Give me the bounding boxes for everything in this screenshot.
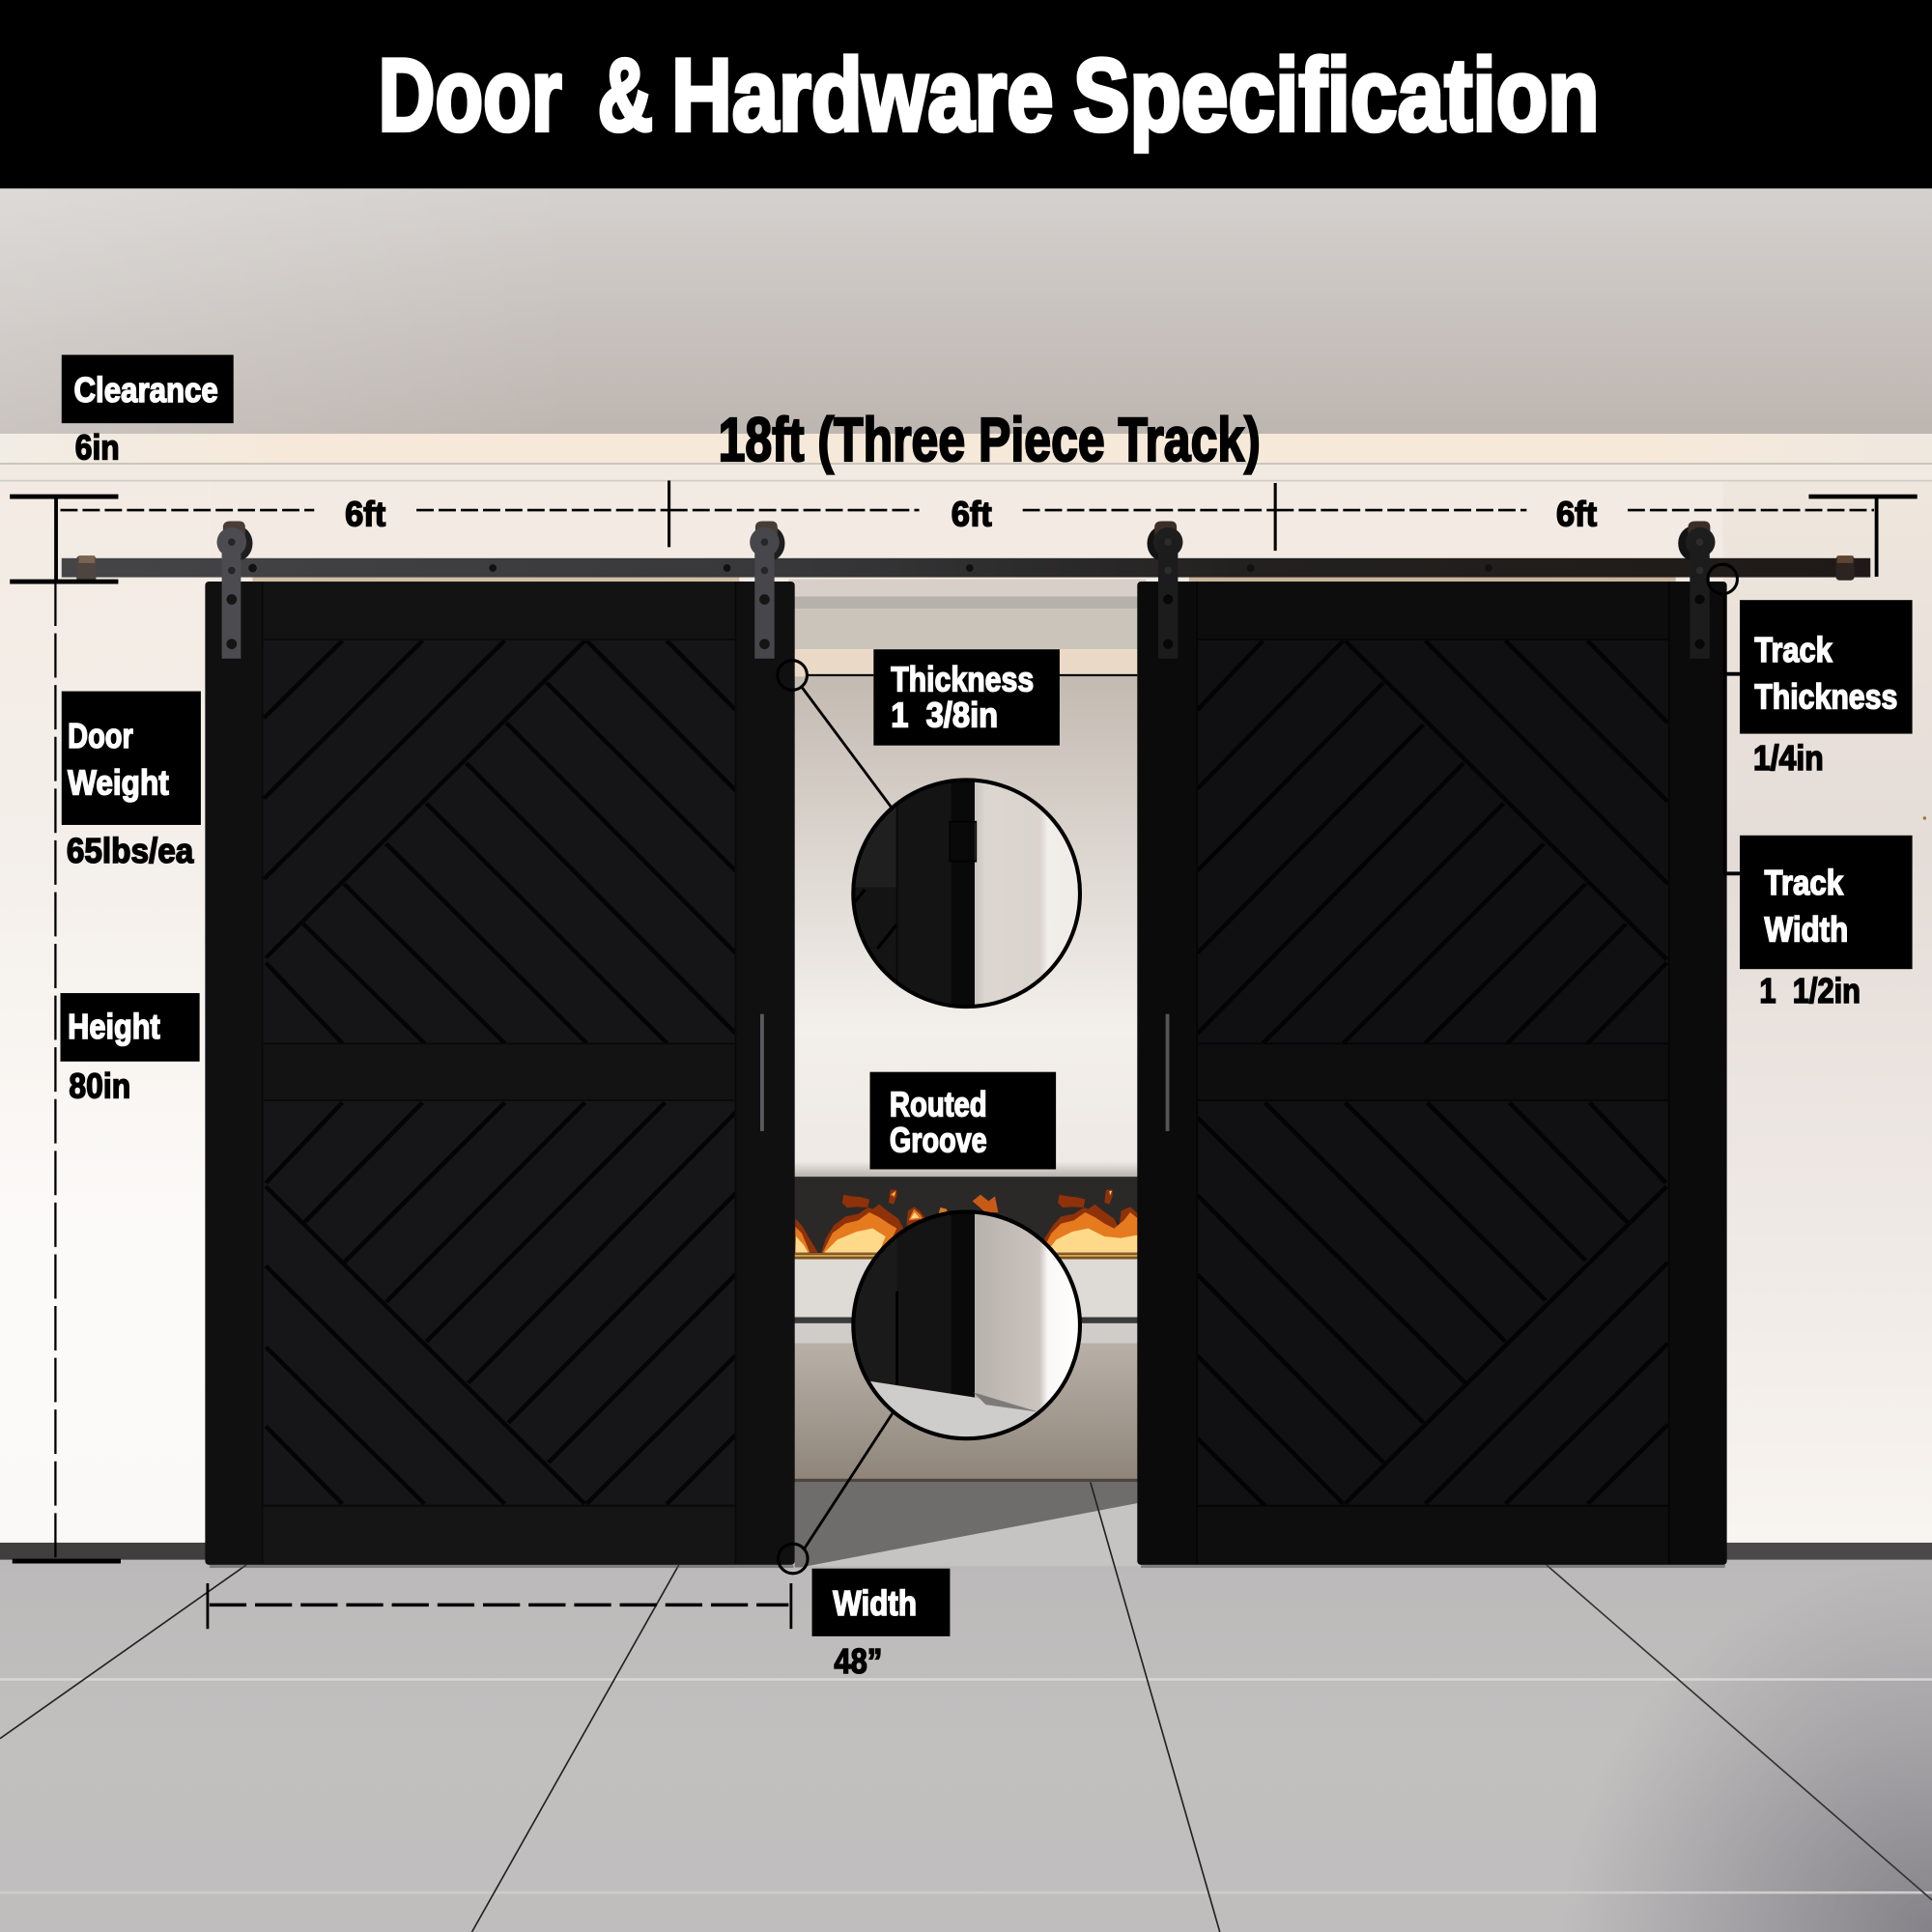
lower panel [263, 1100, 735, 1506]
track callout leaders [1708, 564, 1740, 873]
routed groove callout [870, 1072, 1056, 1169]
title text [379, 37, 1600, 153]
lower panel [1197, 1100, 1669, 1506]
thickness callout: 1 3/8in [891, 696, 998, 735]
left stop [76, 555, 96, 582]
centre flame [973, 1195, 998, 1212]
track width callout: Track [1765, 864, 1843, 902]
left door [205, 582, 795, 1565]
hanger 3 [1148, 522, 1182, 659]
width callout [812, 1569, 950, 1681]
bottom rail [1197, 1506, 1669, 1564]
upper panel grooves [1197, 640, 1668, 1043]
left flame body [795, 1190, 925, 1253]
magnifier: groove [850, 1208, 1084, 1441]
warm gap above doors [252, 577, 739, 582]
magnifier: thickness [850, 777, 1084, 1010]
door thickness detail [778, 661, 1137, 1010]
lower panel grooves [266, 1102, 736, 1504]
height callout: 80in [69, 1066, 130, 1105]
upper panel [1197, 639, 1669, 1043]
door frame [1137, 582, 1727, 1565]
track width callout: Width [1765, 910, 1848, 949]
hanger 4 [1678, 522, 1716, 659]
door contact shadow [210, 1565, 1725, 1568]
track section dimensions [60, 480, 1918, 577]
overall height dimension [10, 497, 121, 1561]
leader line [804, 1412, 894, 1550]
height callout: Height [68, 1008, 160, 1046]
height callout [60, 993, 200, 1105]
rug [788, 1343, 1146, 1479]
right wall [1722, 482, 1932, 1544]
track width callout [1740, 836, 1913, 1010]
track bolts [248, 564, 1492, 572]
rail edges [263, 582, 735, 1564]
right flame core [1041, 1212, 1138, 1253]
wall trim [0, 464, 1932, 480]
thickness callout [873, 649, 1060, 746]
title text: Hardware [671, 37, 1054, 153]
marker circle [778, 1544, 808, 1574]
hanger 1 [216, 522, 252, 659]
hanger 2 [750, 522, 784, 659]
floor tile joints [0, 1565, 1932, 1932]
fireplace [788, 1177, 1146, 1253]
top rail [263, 582, 735, 639]
width callout: 48” [835, 1642, 882, 1681]
width dimension [208, 1583, 791, 1629]
label 6ft centre: 6ft [952, 496, 992, 534]
thickness callout: Thickness [891, 661, 1034, 699]
upper panel [263, 639, 735, 1043]
track width callout: 1 1/2in [1759, 972, 1861, 1010]
lower panel grooves [1197, 1102, 1668, 1506]
door weight callout: Weight [68, 764, 169, 803]
right door [1137, 582, 1727, 1565]
ceiling [0, 188, 1932, 435]
centre room seen between the doors [788, 579, 1220, 1932]
right flame body [1040, 1190, 1138, 1253]
clearance callout: 6in [75, 429, 120, 468]
middle rail [1197, 1043, 1669, 1100]
door frame [205, 582, 795, 1565]
leader lines [802, 675, 1137, 809]
flames [795, 1190, 1138, 1253]
track length heading: 18ft (Three Piece Track) [719, 405, 1261, 474]
upper wall strip [210, 482, 1722, 582]
routed groove detail [778, 1208, 1084, 1574]
title text: & [598, 37, 653, 153]
track thickness callout: Track [1754, 631, 1833, 669]
rail edges [1197, 582, 1669, 1564]
cove light [0, 434, 1932, 464]
right flame glow [1046, 1191, 1138, 1253]
baseboard [0, 1543, 210, 1560]
track thickness callout: 1/4in [1753, 739, 1824, 778]
label 6ft right: 6ft [1556, 496, 1597, 534]
middle rail [263, 1043, 735, 1100]
marker circle [778, 661, 807, 690]
floor [0, 1560, 1932, 1932]
door pull [760, 1014, 764, 1131]
bottom rail [263, 1506, 735, 1564]
top rail [1197, 582, 1669, 639]
width callout: Width [833, 1584, 917, 1623]
door weight callout [62, 692, 201, 870]
left flame core [795, 1191, 923, 1253]
title bar [0, 0, 1932, 188]
upper panel grooves [264, 640, 736, 1043]
track thickness callout: Thickness [1754, 677, 1897, 716]
magnifier floor [870, 1381, 1037, 1437]
routed groove callout: Groove [890, 1122, 987, 1160]
label 6ft left: 6ft [345, 496, 385, 534]
door weight callout: 65lbs/ea [67, 832, 194, 870]
left flame glow [795, 1191, 920, 1253]
stray flame speck [1923, 816, 1926, 820]
routed groove callout: Routed [890, 1086, 987, 1124]
title text: Door [379, 37, 562, 153]
sliding track with hangers [62, 522, 1870, 659]
door weight callout: Door [68, 717, 133, 755]
title text: Specification [1073, 37, 1600, 153]
track bar [62, 558, 1870, 578]
clearance callout: Clearance [74, 371, 218, 410]
track thickness callout [1740, 600, 1913, 778]
centre floor and shadow [788, 1482, 1146, 1566]
left wall [0, 482, 210, 1544]
clearance callout [62, 355, 234, 468]
right stop [1836, 555, 1855, 581]
door pull [1166, 1014, 1169, 1131]
